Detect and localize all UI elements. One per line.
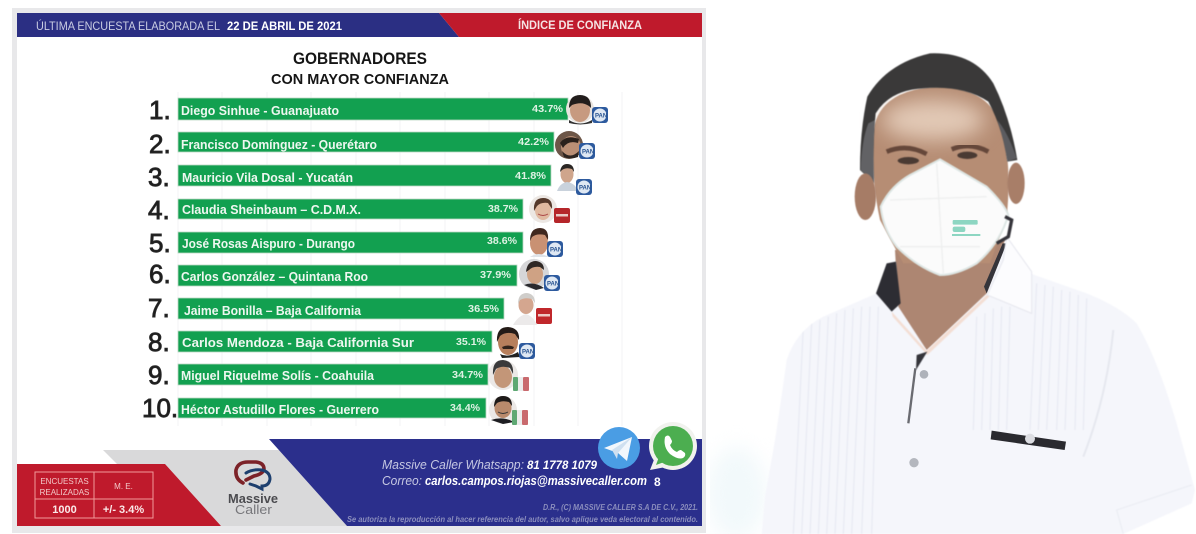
row 5: José Rosas Aispuro: PAN — [550, 248, 562, 254]
row 6: Carlos González — [149, 259, 560, 291]
row 7: Jaime Bonilla: 36.5% — [468, 304, 499, 315]
row 4: Claudia Sheinbaum: 38.7% — [488, 204, 518, 215]
email label: Correo: — [382, 474, 422, 488]
shirt collars — [892, 237, 1032, 370]
row 3: Mauricio Vila Dosal: PAN — [579, 186, 591, 192]
forehead highlight — [882, 100, 985, 140]
whatsapp number: 81 1778 1079 — [527, 458, 597, 472]
row 6: Carlos González: 37.9% — [480, 270, 511, 281]
header blue band — [17, 13, 459, 37]
footer grey band — [103, 450, 347, 526]
icon: whatsapp — [649, 422, 697, 470]
row 4: Claudia Sheinbaum: 4. — [148, 195, 170, 225]
row 2: Francisco Domínguez: 2. — [149, 129, 171, 159]
copyright line: D.R., (C) MASSIVE CALLER S.A DE C.V., 2021. — [543, 503, 698, 512]
footer red panel with survey table — [17, 464, 221, 526]
index label: ÍNDICE DE CONFIANZA — [518, 17, 642, 32]
email address: carlos.campos.riojas@massivecaller.com — [425, 474, 647, 488]
row 3: Mauricio Vila Dosal — [148, 162, 592, 195]
row 7: Jaime Bonilla: 7. — [148, 293, 170, 323]
row 2: Francisco Domínguez: Francisco Domínguez - Querétaro — [181, 137, 377, 152]
face mask — [881, 159, 1012, 275]
Massive Caller logo — [228, 462, 278, 517]
row 3: Mauricio Vila Dosal: 41.8% — [515, 171, 546, 182]
row 3: Mauricio Vila Dosal: Mauricio Vila Dosal - Yucatán — [182, 170, 353, 185]
face — [872, 87, 1009, 263]
row 9: Miguel Riquelme Solís — [148, 360, 529, 391]
survey table: M. E. — [114, 482, 133, 491]
row 7: Jaime Bonilla: Jaime Bonilla – Baja California — [184, 303, 362, 318]
shirt button lower — [909, 458, 919, 467]
row 10: Héctor Astudillo Flores: 34.4% — [450, 403, 480, 414]
header bar — [17, 13, 702, 37]
icon: telegram — [598, 427, 640, 469]
row 9: Miguel Riquelme Solís: 9. — [148, 360, 170, 390]
right ear — [1007, 163, 1025, 204]
whatsapp contact line: Massive Caller Whatsapp: — [382, 458, 524, 472]
shirt pocket trim — [991, 431, 1066, 450]
eyes and brows — [887, 146, 988, 164]
title line 2: CON MAYOR CONFIANZA — [271, 71, 449, 88]
reproduction notice: Se autoriza la reproducción al hacer referencia del autor, salvo aplique veda electoral al contenido. — [347, 515, 698, 524]
placket line — [908, 368, 915, 423]
row 1: Diego Sinhue: Diego Sinhue - Guanajuato — [181, 103, 339, 118]
survey table: REALIZADAS — [40, 488, 89, 497]
row 8: Carlos Mendoza: Carlos Mendoza - Baja California Sur — [182, 335, 414, 350]
row 8: Carlos Mendoza: 35.1% — [456, 337, 486, 348]
row 2: Francisco Domínguez: 42.2% — [518, 137, 549, 148]
row 5: José Rosas Aispuro: 5. — [149, 228, 171, 258]
row 10: Héctor Astudillo Flores: 10. — [142, 393, 178, 423]
row 8: Carlos Mendoza — [148, 327, 535, 359]
portrait photo — [707, 53, 1195, 534]
row 10: Héctor Astudillo Flores: Héctor Astudillo Flores - Guerrero — [181, 402, 379, 417]
row 8: Carlos Mendoza: 8. — [148, 327, 170, 357]
pocket button — [1025, 434, 1035, 444]
row 2: Francisco Domínguez: PAN — [582, 150, 594, 156]
mask logo — [952, 220, 980, 236]
row 1: Diego Sinhue: 1. — [149, 95, 171, 125]
row 6: Carlos González: PAN — [547, 282, 559, 288]
row 9: Miguel Riquelme Solís: Miguel Riquelme Solís - Coahuila — [181, 368, 375, 383]
row 10: Héctor Astudillo Flores — [142, 393, 528, 425]
ranking bar chart — [142, 95, 608, 425]
row 5: José Rosas Aispuro: 38.6% — [487, 236, 517, 247]
row 1: Diego Sinhue — [149, 95, 608, 125]
header red band — [439, 13, 702, 37]
survey table — [35, 472, 153, 518]
logo wordmark: Massive — [228, 491, 278, 506]
row 9: Miguel Riquelme Solís: 34.7% — [452, 370, 483, 381]
row 7: Jaime Bonilla — [148, 293, 552, 325]
dark collar lining — [876, 262, 901, 312]
shirt — [762, 243, 1195, 534]
title — [271, 49, 449, 88]
row 5: José Rosas Aispuro: José Rosas Aispuro - Durango — [182, 236, 355, 251]
survey table: +/- 3.4% — [103, 504, 144, 516]
left ear — [855, 173, 876, 220]
survey date text: ÚLTIMA ENCUESTA ELABORADA EL — [36, 18, 220, 33]
infographic card frame — [12, 8, 706, 533]
row 6: Carlos González: Carlos González – Quintana Roo — [181, 269, 368, 284]
row 6: Carlos González: 6. — [149, 259, 171, 289]
logo speech bubbles — [236, 462, 270, 489]
row 8: Carlos Mendoza: PAN — [522, 350, 534, 356]
hair — [860, 53, 1017, 183]
neck — [895, 240, 1005, 350]
survey table: 1000 — [52, 504, 77, 516]
survey table: ENCUESTAS — [40, 477, 89, 486]
row 2: Francisco Domínguez — [149, 129, 595, 159]
background haze — [710, 452, 762, 534]
row 3: Mauricio Vila Dosal: 3. — [148, 162, 170, 192]
page number: 8 — [654, 475, 661, 489]
shirt button upper — [920, 370, 928, 379]
row 4: Claudia Sheinbaum: Claudia Sheinbaum – C.D.M.X. — [182, 202, 361, 217]
row 1: Diego Sinhue: 43.7% — [532, 104, 563, 115]
survey date value: 22 DE ABRIL DE 2021 — [227, 19, 342, 33]
footer contact panel — [269, 439, 702, 526]
row 1: Diego Sinhue: PAN — [595, 114, 607, 120]
row 5: José Rosas Aispuro — [149, 228, 563, 258]
title line 1: GOBERNADORES — [293, 49, 427, 68]
row 4: Claudia Sheinbaum — [148, 195, 570, 225]
logo sub-wordmark: Caller — [235, 503, 272, 517]
